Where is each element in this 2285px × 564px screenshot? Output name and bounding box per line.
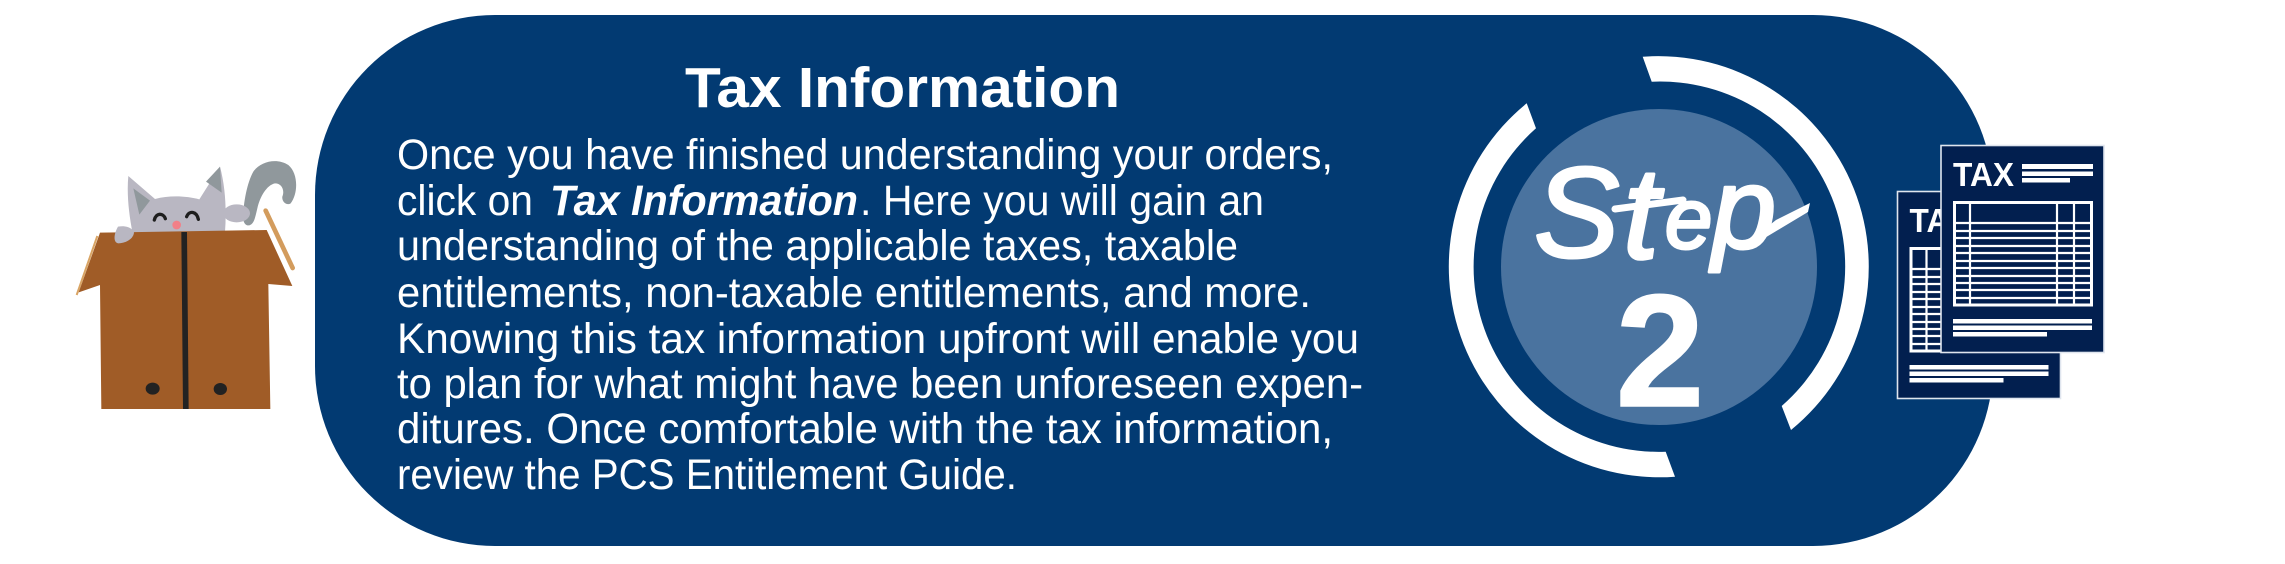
panel: navy pill background <box>315 15 1993 546</box>
box left flap edge <box>77 236 97 295</box>
step badge <box>1449 56 1869 477</box>
body text block: understanding of the applicable taxes, taxable <box>397 222 1238 270</box>
icon: front tax document <box>1941 146 2104 352</box>
cat head <box>128 167 226 233</box>
step number: 2 <box>1616 261 1704 440</box>
body text block: Once you have finished understanding your orders, <box>397 131 1333 179</box>
cat tail <box>243 161 296 225</box>
box right dot <box>214 383 227 395</box>
badge inner circle <box>1501 109 1817 425</box>
step label: p <box>1709 145 1776 273</box>
icon: cat in a cardboard box <box>77 161 296 409</box>
body text block: review the PCS Entitlement Guide. <box>397 451 1017 499</box>
body text block: click on <box>397 177 533 225</box>
cat right paw <box>223 204 250 222</box>
box tape <box>181 232 189 409</box>
heading: Tax Information <box>685 56 1120 120</box>
left inner ear <box>133 188 150 215</box>
box left dot <box>146 383 160 395</box>
body text block: to plan for what might have been unforeseen expen- <box>397 360 1363 408</box>
box body <box>79 230 292 409</box>
ring arc right <box>1643 56 1869 430</box>
body text block: entitlements, non-taxable entitlements, and more. <box>397 269 1311 317</box>
right inner ear <box>206 167 222 193</box>
body text block <box>397 131 1363 499</box>
icon: back tax document <box>1898 192 2060 398</box>
step label: t <box>1623 140 1664 286</box>
body text block: Tax Information <box>550 177 858 225</box>
step label: S <box>1534 142 1619 285</box>
step t crossbar <box>1615 200 1683 209</box>
cat left paw <box>115 226 134 243</box>
body text block: . Here you will gain an <box>860 177 1264 225</box>
icon: back tax document: TAX <box>1910 202 1970 239</box>
icon: front tax document: TAX <box>1953 156 2014 193</box>
cat eyes <box>154 212 198 220</box>
ring arc left <box>1449 103 1675 477</box>
cat nose <box>172 221 181 229</box>
body text block: ditures. Once comfortable with the tax information, <box>397 405 1333 453</box>
box flap stick <box>266 211 293 268</box>
step flourish <box>1742 203 1810 248</box>
step label: e <box>1665 172 1712 267</box>
body text block: Knowing this tax information upfront will enable you <box>397 315 1359 363</box>
